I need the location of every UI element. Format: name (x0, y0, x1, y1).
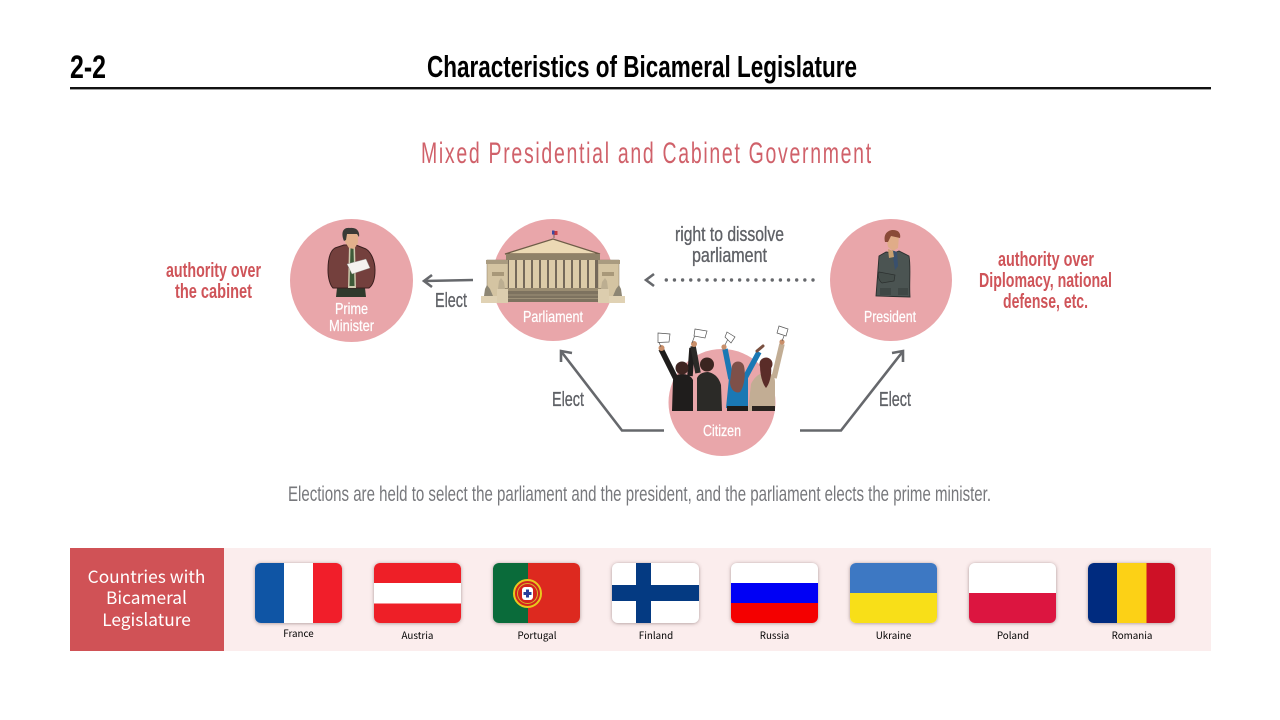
label: elect left: Elect (552, 389, 584, 411)
note: authority over the cabinet (166, 260, 261, 303)
flag: Portugal (493, 563, 580, 642)
flag: Austria: Austria (402, 628, 433, 642)
icon: prime minister figure (328, 228, 375, 297)
label: parliament: Parliament (523, 309, 583, 326)
flag: Russia: Russia (760, 628, 789, 642)
label: president: President (864, 309, 916, 326)
flag: Ukraine (850, 563, 937, 642)
note: authority over diplomacy and defense: defense, etc. (1003, 291, 1088, 313)
label: elect: Elect (435, 290, 467, 312)
flag: Ukraine: Ukraine (876, 628, 912, 642)
person two (691, 329, 722, 411)
note: authority over the cabinet: the cabinet (175, 281, 252, 303)
person three (721, 332, 763, 411)
arrow: parliament elects prime minister (424, 275, 473, 287)
description: Elections are held to select the parliament and the president, and the parliament elects the prime minister. (288, 483, 991, 506)
heading box: Bicameral (106, 584, 187, 609)
flag: Romania (1088, 563, 1176, 642)
note: authority over the cabinet: authority over (166, 260, 261, 282)
note: authority over diplomacy and defense: authority over (998, 249, 1094, 271)
panel: countries with bicameral legislature (70, 548, 1211, 651)
label: right to dissolve parliament: parliament (692, 245, 767, 267)
arrow: citizens elect parliament (561, 351, 664, 430)
flag: Austria (374, 563, 461, 642)
flag: Portugal: Portugal (518, 628, 557, 642)
label: prime minister: Minister (329, 318, 375, 335)
person four (748, 326, 788, 411)
label: right to dissolve parliament (675, 224, 784, 267)
icon: citizens raising flags (658, 326, 788, 411)
arrow: dotted dissolve arrow (646, 274, 813, 286)
heading box: Legislature (102, 606, 191, 631)
note: authority over diplomacy and defense (979, 249, 1112, 313)
node: citizen (658, 326, 788, 456)
note: authority over diplomacy and defense: Diplomacy, national (979, 270, 1112, 292)
flag: Finland: Finland (639, 628, 673, 642)
label: prime minister: Prime (335, 301, 368, 318)
flag: Romania: Romania (1112, 628, 1152, 642)
person one (658, 333, 693, 411)
heading box (70, 548, 224, 651)
label: elect right: Elect (879, 389, 911, 411)
flag: Finland (612, 563, 699, 642)
node: prime minister (290, 219, 413, 342)
title: Characteristics of Bicameral Legislature (427, 49, 857, 84)
label: citizen: Citizen (703, 423, 741, 440)
flag: France (255, 563, 342, 640)
label: prime minister (329, 301, 375, 335)
icon: president figure (876, 230, 910, 297)
flag: Poland (969, 563, 1056, 642)
heading box: Countries with (88, 563, 205, 588)
arrow: citizens elect president (800, 351, 903, 430)
subtitle: Mixed Presidential and Cabinet Government (421, 137, 871, 170)
flag: Russia (731, 563, 818, 642)
label: right to dissolve parliament: right to dissolve (675, 224, 784, 246)
flag: Poland: Poland (997, 628, 1029, 642)
flag: France: France (283, 626, 314, 640)
node: president (830, 219, 952, 341)
section number: 2-2 (70, 49, 106, 85)
icon: parliament building (481, 230, 625, 303)
node: parliament (481, 219, 625, 341)
